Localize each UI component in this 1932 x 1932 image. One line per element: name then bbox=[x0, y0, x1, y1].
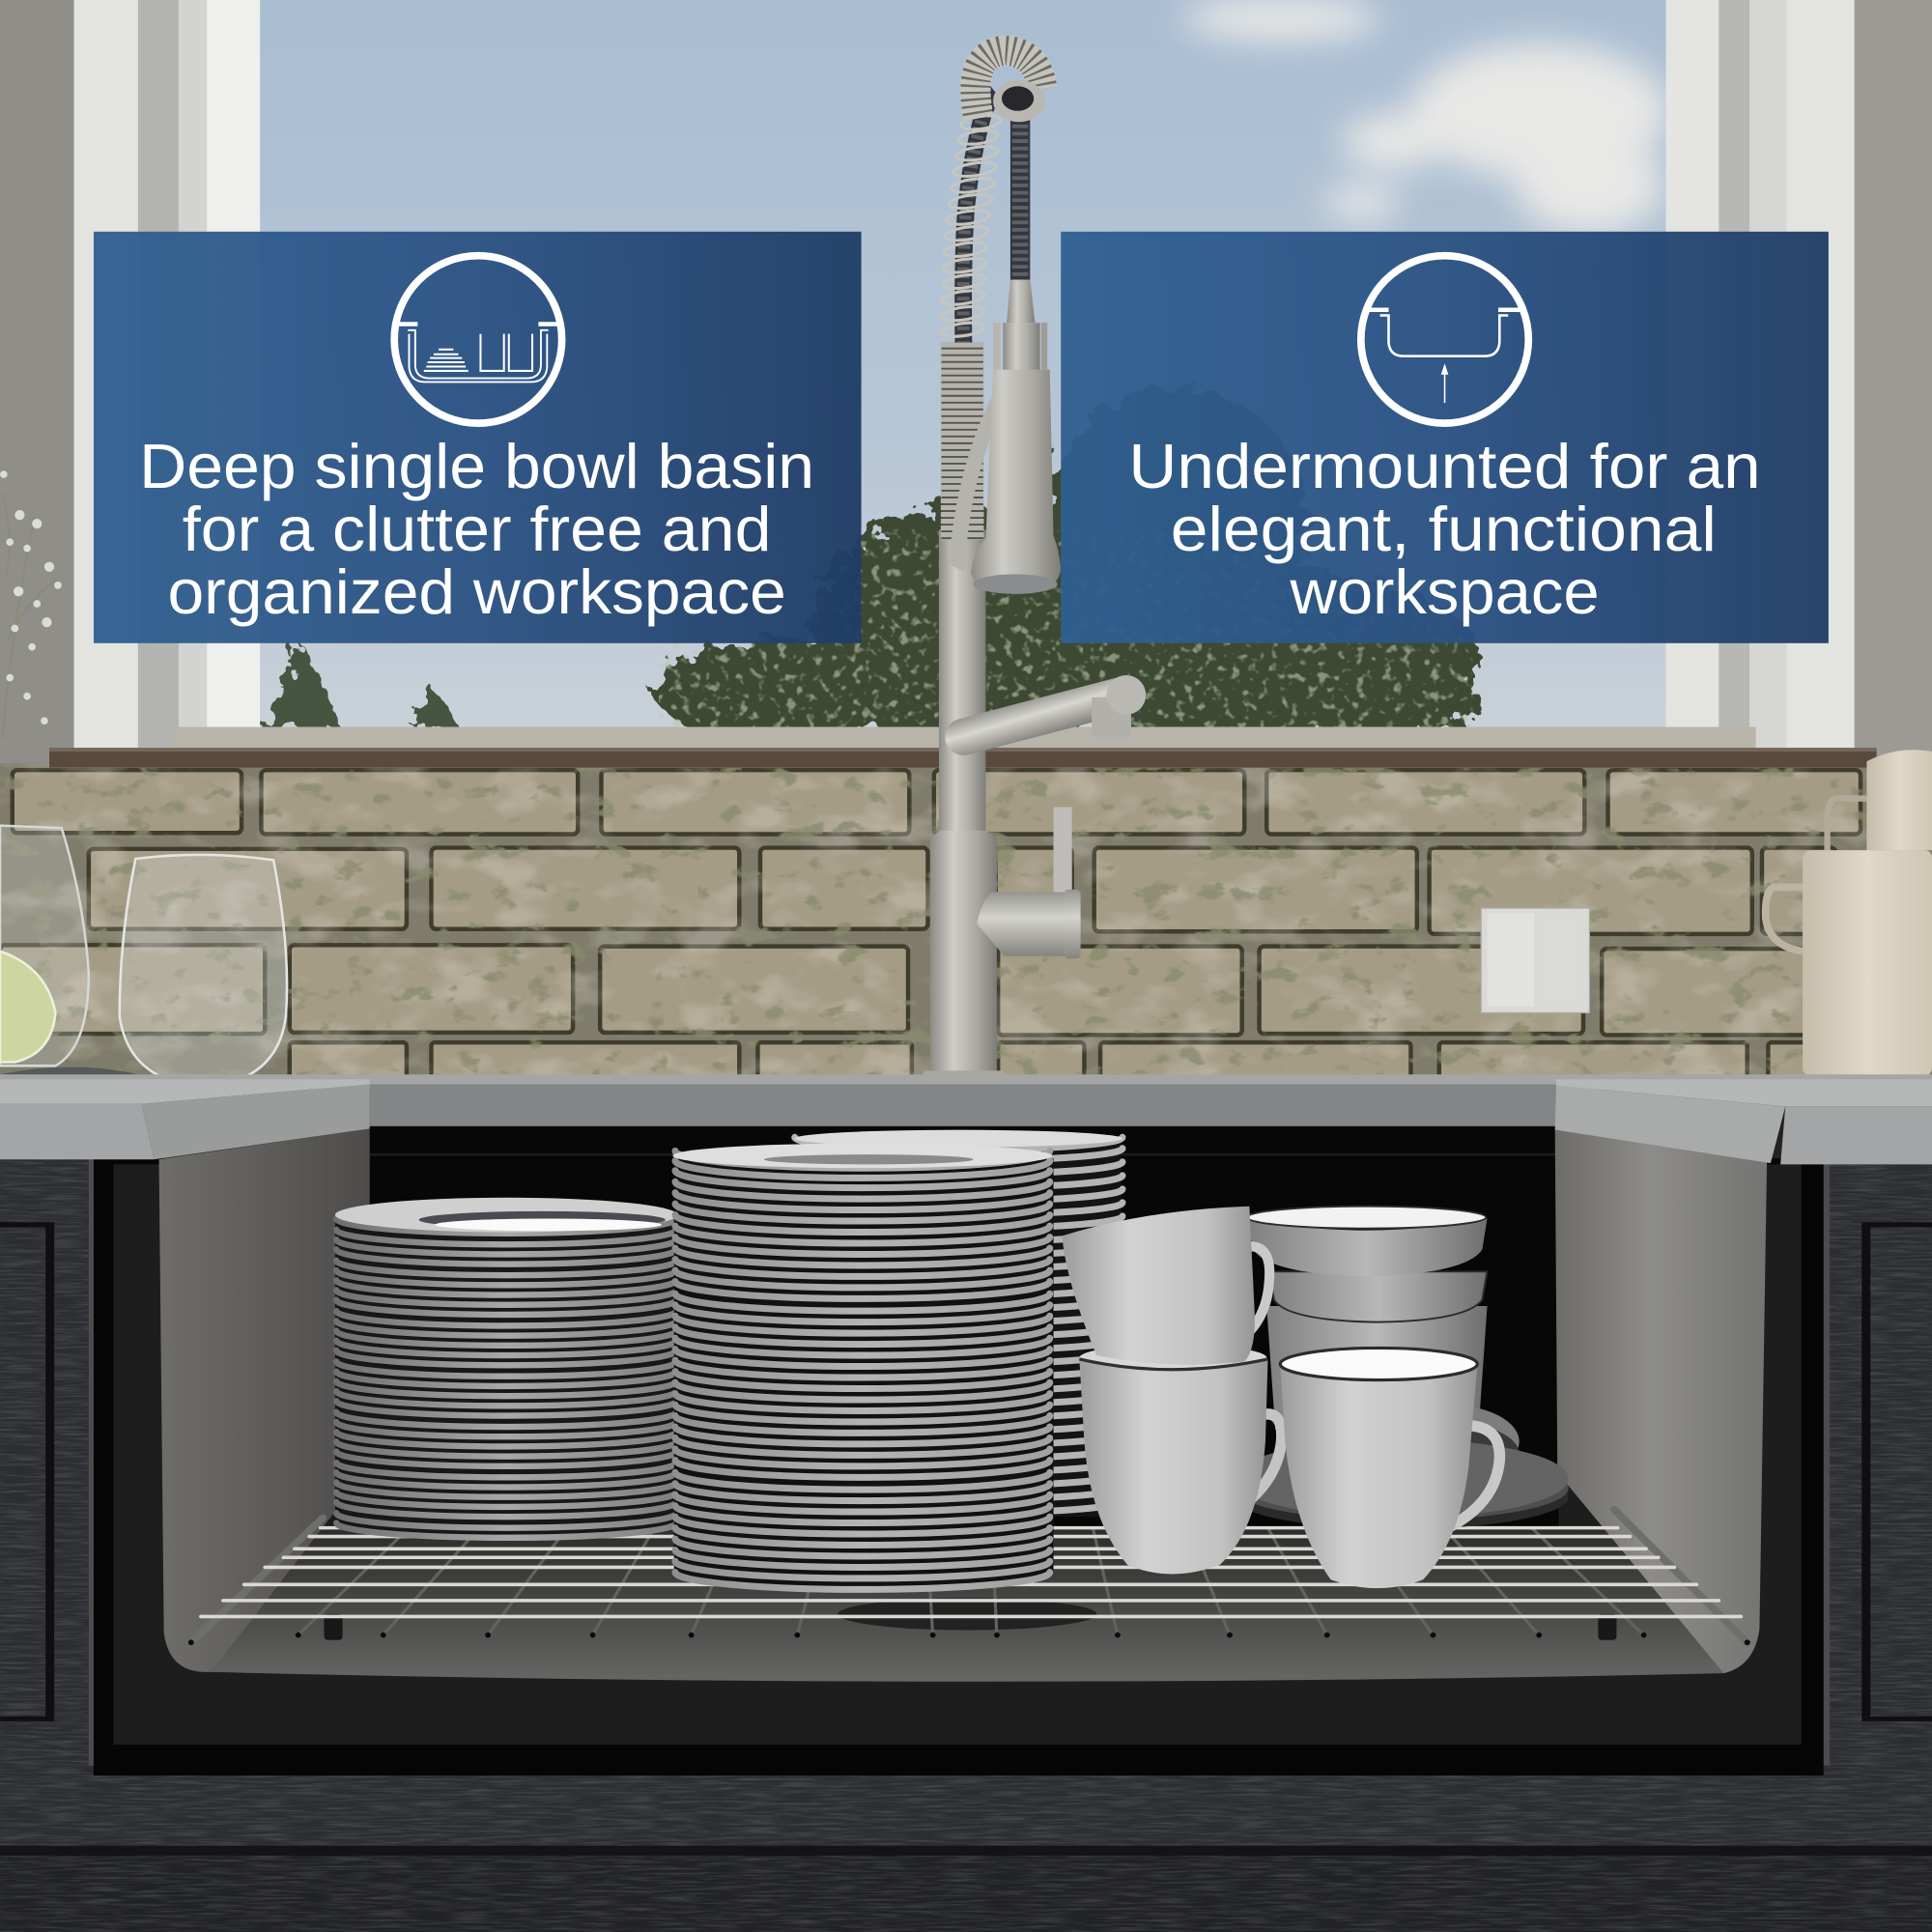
glasses and lime bbox=[0, 826, 287, 1087]
mug lower left bbox=[1062, 1207, 1282, 1574]
trees outside window bbox=[261, 388, 1485, 752]
flower sprig bbox=[0, 470, 62, 739]
icon: basin with dishes bbox=[394, 256, 562, 423]
faucet handle bbox=[977, 807, 1081, 958]
text: undermount feature: workspace bbox=[1289, 556, 1600, 627]
cabinet door left bbox=[0, 1222, 54, 1721]
text: undermount feature bbox=[1128, 431, 1761, 627]
empty glass bbox=[120, 855, 287, 1087]
wood shelf bbox=[49, 748, 1877, 768]
panel: undermounted bbox=[1061, 232, 1829, 643]
spout bbox=[963, 675, 1146, 737]
faucet column bbox=[939, 529, 985, 838]
countertop bbox=[0, 1074, 1932, 1164]
brick backsplash bbox=[0, 764, 1932, 1087]
wall light switch bbox=[1481, 908, 1589, 1012]
text: basin feature: Deep single bowl basin bbox=[139, 431, 814, 501]
mug front bbox=[1280, 1348, 1499, 1588]
text: basin feature: for a clutter free and bbox=[183, 494, 771, 564]
grate cross bars bbox=[191, 1509, 1747, 1642]
clouds bbox=[1182, 0, 1669, 234]
plate stack left bbox=[335, 1198, 678, 1539]
spray head bbox=[971, 280, 1061, 594]
sink right wall bbox=[1555, 1130, 1767, 1673]
faucet bbox=[923, 50, 1146, 1082]
sink left wall bbox=[159, 1128, 370, 1672]
faucet arm bow bbox=[949, 397, 993, 572]
drain bbox=[838, 1598, 1096, 1631]
icon: undermount basin with arrow bbox=[1361, 256, 1528, 423]
text: undermount feature: elegant, functional bbox=[1171, 494, 1717, 564]
plate stack back bbox=[795, 1130, 1122, 1517]
text: undermount feature: Undermounted for an bbox=[1128, 431, 1761, 501]
panel: deep single bowl basin bbox=[94, 232, 862, 643]
folded napkin bbox=[0, 1067, 138, 1094]
sink back wall bbox=[370, 1126, 1559, 1533]
beige canisters bbox=[1766, 750, 1932, 1076]
plate stack center bbox=[672, 1144, 1054, 1591]
faucet base bbox=[930, 831, 997, 1072]
cabinet door right bbox=[1861, 1222, 1932, 1721]
bowls bbox=[1247, 1207, 1488, 1430]
text: basin feature: organized workspace bbox=[167, 556, 786, 627]
sink outer frame bbox=[89, 1155, 1830, 1776]
room background wall bbox=[0, 0, 1932, 764]
grate rods bbox=[201, 1528, 1741, 1616]
spring coil and hose bbox=[941, 50, 1042, 540]
text: basin feature bbox=[139, 431, 814, 627]
sink floor bbox=[212, 1528, 1723, 1682]
cabinet base bbox=[0, 1158, 1932, 1932]
small plates behind mugs bbox=[1234, 1405, 1569, 1529]
window sill bbox=[173, 727, 1756, 750]
grate feet bbox=[324, 1614, 1616, 1640]
glass with lime bbox=[0, 826, 89, 1065]
window with sky bbox=[74, 0, 1855, 748]
wire grate bbox=[191, 1509, 1747, 1642]
